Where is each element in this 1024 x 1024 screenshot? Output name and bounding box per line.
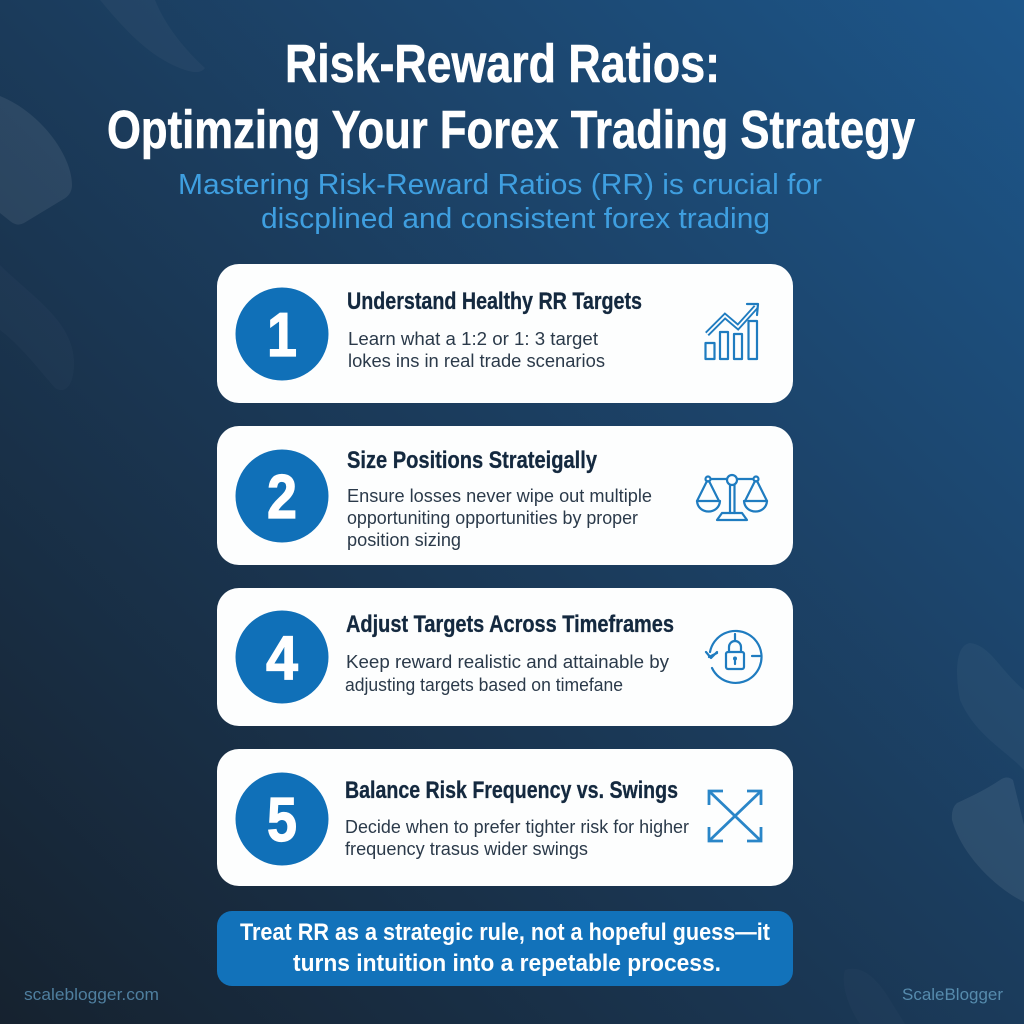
panel: step 1 [217, 264, 793, 403]
heading: Size Positions Strateigally [347, 447, 598, 474]
callout: Treat RR as a strategic rule, not a hopeful guess—it [240, 919, 770, 946]
number badge 4: 4 [266, 624, 298, 693]
heading: Adjust Targets Across Timeframes [346, 611, 674, 638]
subtitle [178, 169, 822, 235]
description [345, 652, 669, 695]
heading: Understand Healthy RR Targets [347, 288, 642, 315]
heading: Balance Risk Frequency vs. Swings [345, 777, 678, 804]
subtitle: discplined and consistent forex trading [261, 203, 770, 235]
title [107, 34, 915, 160]
description: Keep reward realistic and attainable by [346, 652, 669, 672]
callout: turns intuition into a repetable process. [293, 950, 721, 977]
description: frequency trasus wider swings [345, 839, 588, 859]
icon: clock lock [706, 631, 762, 683]
icon: growth chart [706, 304, 758, 359]
number badge 1 [236, 288, 328, 380]
subtitle: Mastering Risk-Reward Ratios (RR) is crucial for [178, 169, 822, 201]
description: lokes ins in real trade scenarios [348, 351, 605, 371]
description [347, 486, 652, 550]
number badge 5: 5 [267, 786, 297, 855]
callout [217, 911, 793, 986]
number badge 2 [236, 450, 328, 542]
title: Risk-Reward Ratios: [285, 34, 720, 94]
icon: balance scales [697, 475, 767, 520]
description: adjusting targets based on timefane [345, 675, 623, 695]
number badge 5 [236, 772, 328, 866]
number badge 4 [236, 610, 328, 704]
description: position sizing [347, 530, 461, 550]
number badge 1: 1 [267, 301, 297, 370]
icon: expanding arrows [709, 791, 761, 841]
footer: website: scaleblogger.com [24, 985, 159, 1004]
description: Learn what a 1:2 or 1: 3 target [348, 329, 598, 349]
description [348, 329, 605, 371]
description: Ensure losses never wipe out multiple [347, 486, 652, 506]
number badge 2: 2 [267, 463, 297, 532]
description [345, 817, 689, 859]
description: Decide when to prefer tighter risk for higher [345, 817, 689, 837]
description: opportuniting opportunities by proper [347, 508, 638, 528]
panel: step 2 [217, 426, 793, 565]
panel: step 4 [217, 588, 793, 726]
footer: brand: ScaleBlogger [902, 985, 1003, 1004]
panel: step 5 [217, 749, 793, 886]
